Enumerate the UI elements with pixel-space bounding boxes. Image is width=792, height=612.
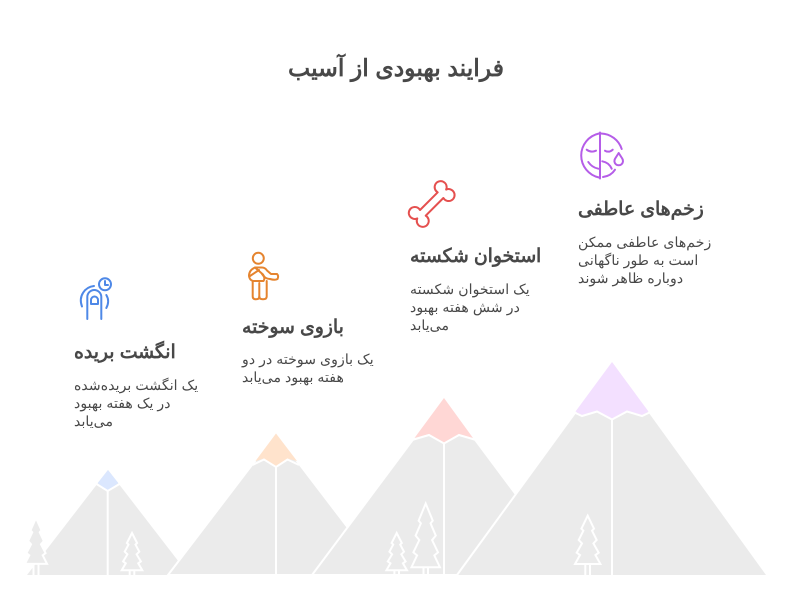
mountain 3: [312, 398, 576, 575]
tree small on mountain 3: [386, 533, 407, 575]
heading: burned arm: بازوی سوخته: [242, 316, 344, 337]
mountain 2: [168, 434, 384, 575]
tree left trunk: [34, 564, 38, 575]
text: broken bone: در شش هفته بهبود: [410, 300, 520, 316]
tree left: [25, 518, 47, 564]
icon: finger with clock: [81, 278, 111, 319]
text: cut finger: در یک هفته بهبود: [74, 396, 171, 412]
text: cut finger: [74, 378, 198, 430]
text: cut finger: یک انگشت بریده‌شده: [74, 378, 198, 394]
text: emotional wounds: [578, 235, 711, 287]
heading: cut finger: انگشت بریده: [74, 341, 176, 362]
text: broken bone: می‌یابد: [410, 318, 449, 334]
text: burned arm: یک بازوی سوخته در دو: [242, 352, 374, 368]
heading: emotional wounds: زخم‌های عاطفی: [578, 198, 704, 219]
mountain 1: [27, 470, 189, 575]
text: broken bone: [410, 282, 530, 334]
text: emotional wounds: زخم‌های عاطفی ممکن: [578, 235, 711, 251]
icon: sad and calm face mask: [581, 132, 623, 178]
text: emotional wounds: دوباره ظاهر شوند: [578, 271, 683, 287]
text: broken bone: یک استخوان شکسته: [410, 282, 530, 298]
text: burned arm: هفته بهبود می‌یابد: [242, 370, 344, 386]
tree large on mountain 3: [411, 504, 440, 575]
text: burned arm: [241, 352, 374, 386]
icon: bone: [406, 179, 457, 229]
tree on mountain 1: [122, 533, 142, 575]
text: cut finger: می‌یابد: [74, 414, 113, 430]
tree on mountain 4: [575, 516, 600, 575]
heading: broken bone: استخوان شکسته: [410, 245, 541, 266]
title: فرایند بهبودی از آسیب: [288, 55, 504, 81]
icon: arm in sling: [249, 253, 278, 299]
text: emotional wounds: است به طور ناگهانی: [578, 253, 698, 269]
mountain 4: [457, 362, 766, 575]
